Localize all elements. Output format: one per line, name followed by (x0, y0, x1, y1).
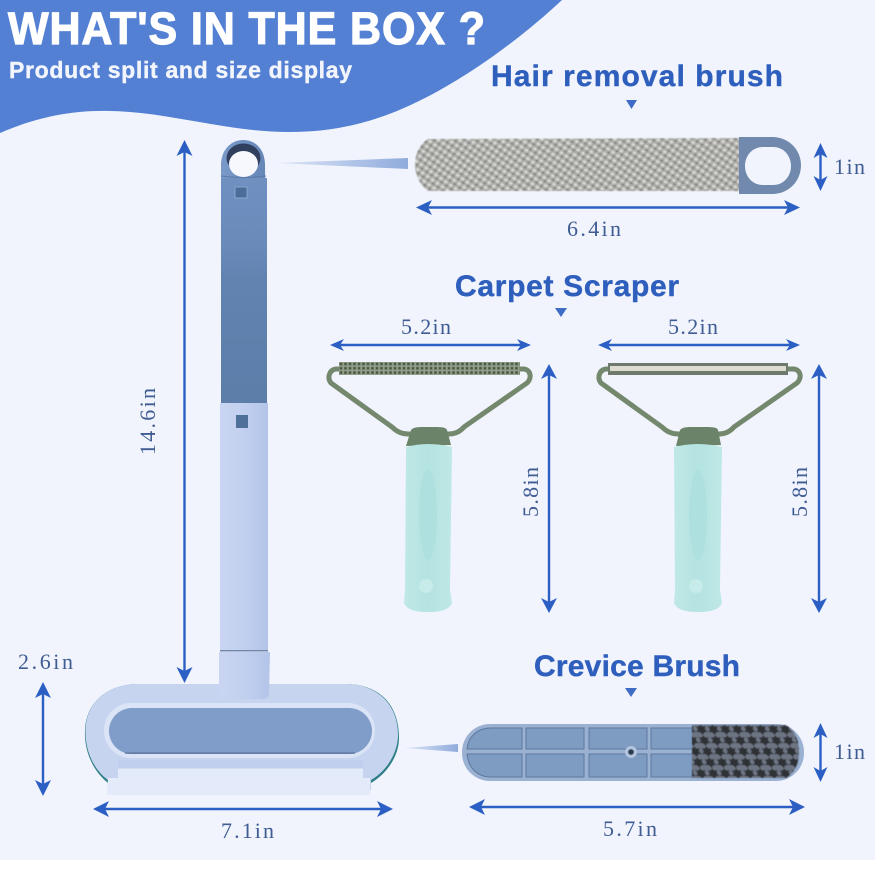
handle grip (689, 470, 707, 560)
label: 5.7in: 5.7in (603, 816, 657, 841)
label: 2.6in: 2.6in (18, 649, 73, 674)
bristles (692, 725, 799, 778)
arrow: right scraper width (598, 339, 800, 351)
label: 5.8in left: 5.8in (518, 467, 543, 517)
brush head (85, 684, 399, 795)
handle (404, 444, 452, 612)
label: 5.2in right: 5.2in (668, 314, 718, 339)
arrow: handle height (176, 140, 192, 683)
arrow: right scraper height (811, 364, 827, 613)
upper handle with loop (221, 140, 267, 403)
heading: crevice brush: Crevice Brush (534, 650, 740, 683)
squeegee blade (107, 768, 370, 795)
header banner (0, 0, 562, 133)
brush ribs (467, 728, 693, 777)
label: 5.8in right: 5.8in (787, 467, 812, 517)
lower handle (220, 403, 268, 650)
product: long handle roller brush (85, 140, 399, 795)
loop handle (739, 137, 801, 194)
metal blade (608, 363, 788, 375)
collar (676, 427, 721, 446)
product: left carpet scraper (329, 362, 530, 612)
title: WHAT'S IN THE BOX ? (8, 4, 485, 54)
subtitle: Product split and size display (9, 57, 352, 83)
product: hair removal brush (415, 137, 801, 194)
marker triangle (625, 688, 637, 697)
collar (406, 427, 451, 446)
handle (674, 444, 722, 612)
label: 14.6in: 14.6in (135, 388, 160, 455)
product: right carpet scraper (599, 363, 800, 612)
comb blade (339, 362, 520, 375)
arrow: left scraper height (541, 364, 557, 613)
arrow: head width (93, 801, 393, 817)
lower band of upper handle (221, 178, 267, 403)
lower handle button (236, 415, 248, 428)
label: 5.2in left: 5.2in (401, 314, 451, 339)
label: 1in: 1in (834, 154, 865, 179)
label: 1in: 1in (834, 739, 865, 764)
frame (599, 369, 800, 434)
handle grip (419, 470, 437, 560)
frame (329, 369, 530, 434)
arrow: head height (35, 682, 51, 796)
base strip (118, 760, 363, 768)
handle joint (219, 652, 270, 699)
upper handle button (235, 187, 247, 198)
arrow: brush length (416, 200, 800, 215)
arrow: crevice brush width (814, 723, 828, 782)
label: 6.4in: 6.4in (567, 216, 621, 241)
pointer to crevice brush (404, 744, 458, 752)
arrow: left scraper width (330, 339, 531, 351)
marker triangle (626, 100, 637, 109)
handle loop hole (226, 144, 260, 177)
screw post (625, 746, 637, 758)
arrow: brush width (814, 143, 828, 191)
pointer to hair removal brush (276, 158, 408, 169)
label: 7.1in: 7.1in (221, 818, 274, 843)
heading: carpet scraper: Carpet Scraper (455, 270, 679, 303)
heading: hair removal brush: Hair removal brush (491, 60, 783, 93)
marker triangle (555, 308, 567, 317)
product: crevice brush (462, 724, 804, 781)
mesh strip (415, 138, 742, 191)
arrow: crevice brush length (469, 799, 805, 815)
head window (104, 703, 375, 758)
